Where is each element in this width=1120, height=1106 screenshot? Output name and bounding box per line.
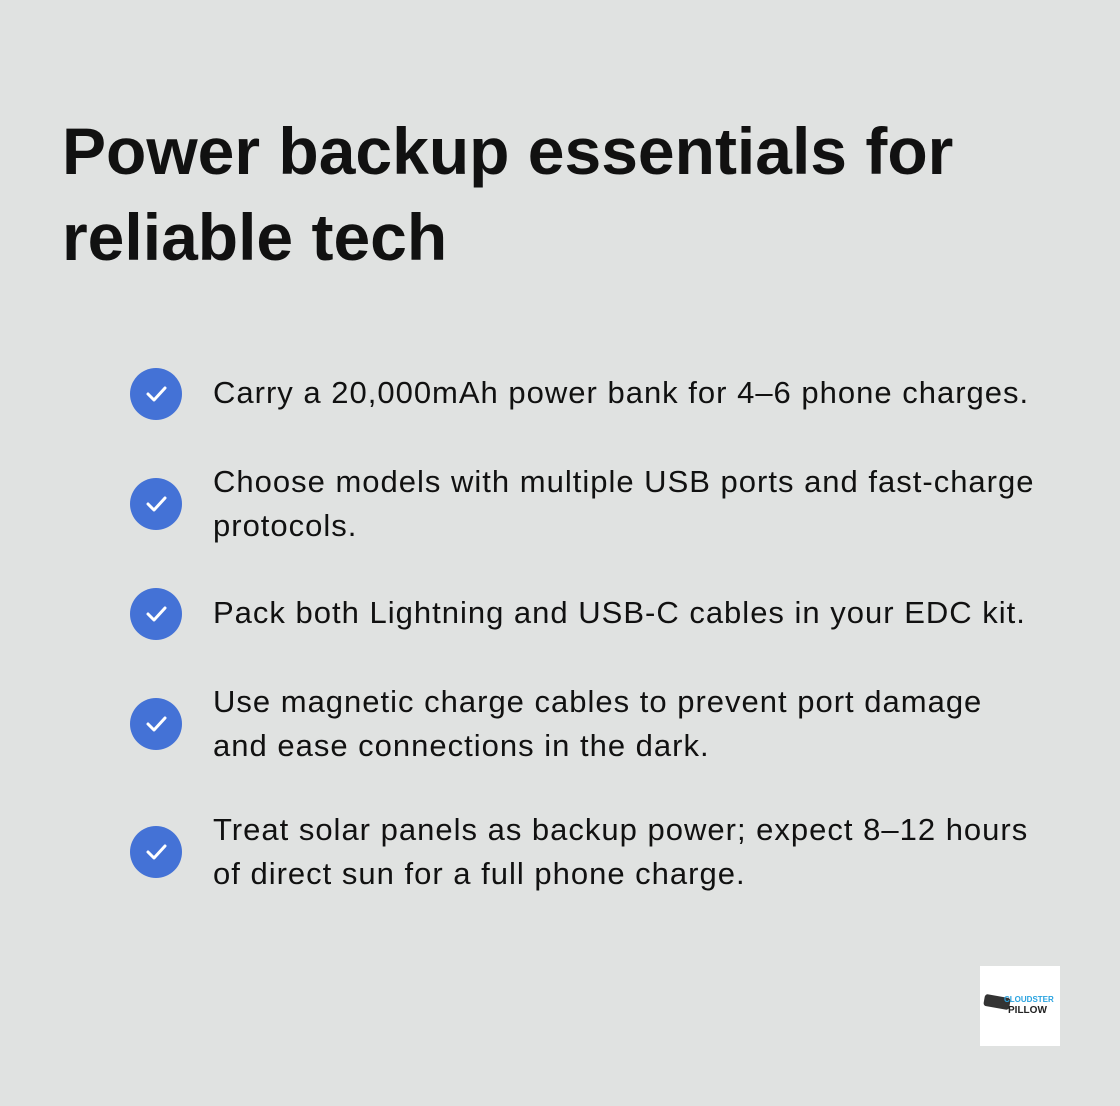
text: and ease connections in the dark. <box>213 728 710 763</box>
text: Pack both Lightning and USB-C cables in your EDC kit. <box>213 595 1026 630</box>
item 4 <box>130 684 982 763</box>
text: Choose models with multiple USB ports and fast-charge protocols. <box>213 464 1034 543</box>
text <box>213 812 1028 891</box>
logo: PILLOW <box>1008 1005 1047 1016</box>
icon: check <box>130 826 182 878</box>
title: Power backup essentials for <box>62 114 953 188</box>
icon: check <box>130 368 182 420</box>
text: Use magnetic charge cables to prevent port damage <box>213 684 982 719</box>
logo <box>980 966 1060 1046</box>
item 3 <box>130 588 1026 640</box>
item 2 <box>130 464 1034 543</box>
text: Carry a 20,000mAh power bank for 4–6 phone charges. <box>213 375 1029 410</box>
logo: CLOUDSTER <box>1004 995 1054 1004</box>
text: Treat solar panels as backup power; expect 8–12 hours <box>213 812 1028 847</box>
title: reliable tech <box>62 200 447 274</box>
item 1 <box>130 368 1029 420</box>
title <box>62 114 953 274</box>
item 5 <box>130 812 1028 891</box>
text <box>213 684 982 763</box>
text: of direct sun for a full phone charge. <box>213 856 746 891</box>
icon: check <box>130 588 182 640</box>
icon: check <box>130 478 182 530</box>
icon: check <box>130 698 182 750</box>
